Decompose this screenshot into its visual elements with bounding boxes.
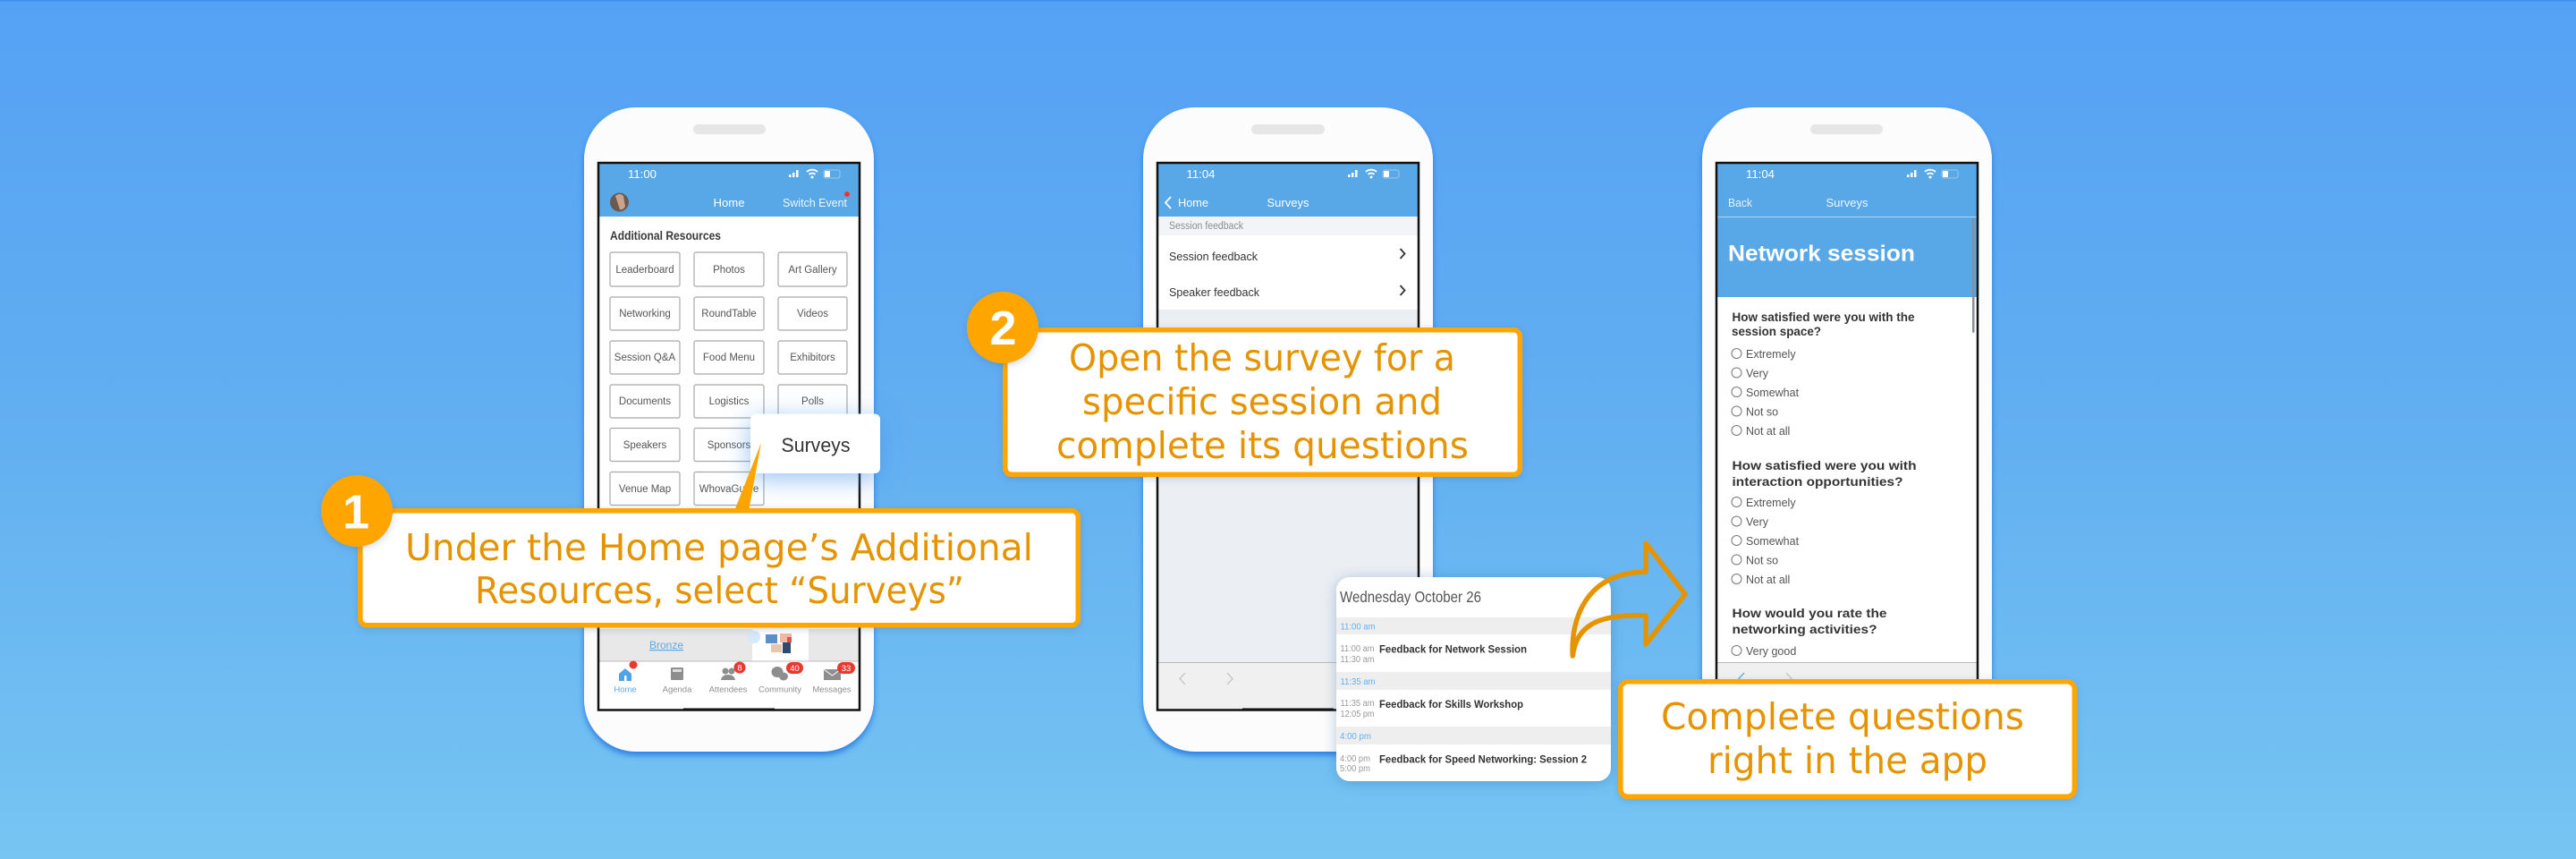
question 1: Extremely xyxy=(1746,348,1796,361)
question 3: How would you rate the xyxy=(1732,606,1887,620)
resource button grid: Photos xyxy=(713,265,745,276)
resource button grid xyxy=(610,252,847,505)
session list card: 11:00 am xyxy=(1340,644,1374,654)
question 1: Not so xyxy=(1746,406,1778,419)
phone 2 header: Home xyxy=(1178,196,1208,209)
callout 2: specific session and xyxy=(1082,380,1442,423)
feedback list: Speaker feedback xyxy=(1169,285,1259,299)
phone 2 header: Surveys xyxy=(1267,196,1309,209)
session list card: 11:00 am xyxy=(1340,621,1376,632)
resource button grid: Exhibitors xyxy=(790,353,835,363)
tab bar: Community xyxy=(758,685,801,694)
feedback list: Session feedback xyxy=(1169,250,1258,263)
tab bar: Messages xyxy=(812,685,852,694)
feedback list: Session feedback xyxy=(1169,221,1243,232)
tab bar: 40 xyxy=(790,664,800,674)
question 2: Somewhat xyxy=(1746,535,1800,548)
phone 3 header: Network session xyxy=(1728,242,1915,267)
session list card: Feedback for Network Session xyxy=(1379,642,1527,655)
question 1 xyxy=(1732,310,1915,438)
phone 2 header: 11:04 xyxy=(1186,167,1215,181)
resource button grid: Session Q&A xyxy=(614,353,676,363)
phone 3: survey questions xyxy=(1702,107,1992,755)
resource button grid: Videos xyxy=(797,309,828,319)
step badge 1: 1 xyxy=(343,485,369,539)
question 1: Very xyxy=(1746,367,1769,379)
resource button grid: Logistics xyxy=(709,396,750,407)
question 3 xyxy=(1732,606,1887,658)
callout 1 xyxy=(360,511,1078,625)
question 1: session space? xyxy=(1732,324,1821,338)
callout 2: Open the survey for a xyxy=(1069,336,1455,379)
phone 1: home screen xyxy=(584,107,874,755)
phone 1 app header: Switch Event xyxy=(783,196,847,209)
question 1: Somewhat xyxy=(1746,387,1800,399)
resource button grid: Leaderboard xyxy=(615,265,674,276)
callout 3 xyxy=(1621,682,2074,796)
tab bar: Home xyxy=(614,685,637,694)
session list card xyxy=(1336,577,1611,781)
phone 3 header: Back xyxy=(1728,196,1752,209)
question 1: How satisfied were you with the xyxy=(1732,310,1915,324)
resource button grid: Networking xyxy=(619,309,671,319)
resource button grid: Food Menu xyxy=(703,353,755,363)
resource button grid: RoundTable xyxy=(701,309,757,319)
phone 1 app header xyxy=(597,162,860,217)
surveys popup xyxy=(750,413,880,473)
resource button grid: Documents xyxy=(619,396,671,407)
callout 3: right in the app xyxy=(1707,739,1987,782)
phone 2: surveys list xyxy=(1143,107,1433,755)
scrollbar xyxy=(1972,218,1975,333)
step badge 2 xyxy=(967,292,1038,363)
question 2: Not so xyxy=(1746,555,1778,567)
resource button grid: Polls xyxy=(801,396,824,407)
session list card: 11:35 am xyxy=(1340,699,1374,709)
additional resources heading: Additional Resources xyxy=(610,229,721,242)
question 2: Not at all xyxy=(1746,574,1790,586)
question 2: Very xyxy=(1746,515,1769,528)
session list card: 4:00 pm xyxy=(1340,754,1370,764)
phone 3 header xyxy=(1716,162,1979,297)
session list card: Feedback for Skills Workshop xyxy=(1379,698,1523,710)
phone 2 header xyxy=(1157,162,1419,217)
tab bar: 33 xyxy=(842,664,851,674)
tab bar xyxy=(614,660,855,710)
surveys popup: Surveys xyxy=(782,434,850,456)
session list card: 11:35 am xyxy=(1340,676,1376,687)
question 2 xyxy=(1732,458,1916,586)
session list card: Feedback for Speed Networking: Session 2 xyxy=(1379,753,1587,766)
phone 2 toolbar xyxy=(1157,662,1419,710)
feedback list xyxy=(1157,217,1419,310)
resource button grid: WhovaGuide xyxy=(699,484,758,495)
tab bar: Attendees xyxy=(709,685,748,694)
session list card: 4:00 pm xyxy=(1340,731,1371,742)
tab bar: 8 xyxy=(737,664,742,673)
session list card: 5:00 pm xyxy=(1340,764,1370,774)
session list card: 12:05 pm xyxy=(1340,710,1374,719)
phone 1 app header: 11:00 xyxy=(628,167,657,181)
callout 1: Resources, select “Surveys” xyxy=(475,569,964,612)
step badge 1 xyxy=(321,475,393,547)
resource button grid: Venue Map xyxy=(619,484,671,495)
callout 1: Under the Home page’s Additional xyxy=(405,526,1033,569)
resource button grid: Speakers xyxy=(623,440,667,451)
callout 2: complete its questions xyxy=(1056,424,1469,467)
tab bar: Agenda xyxy=(663,685,692,694)
question 3: Very good xyxy=(1746,645,1796,658)
question 3: networking activities? xyxy=(1732,622,1877,636)
callout 2 xyxy=(1005,330,1520,474)
session list card: 11:30 am xyxy=(1340,655,1374,665)
sponsor banner xyxy=(598,629,860,661)
step badge 2: 2 xyxy=(989,302,1017,355)
phone 1 app header: Home xyxy=(714,196,744,209)
resource button grid: Art Gallery xyxy=(788,265,837,276)
question 2: How satisfied were you with xyxy=(1732,458,1916,472)
question 2: Extremely xyxy=(1746,497,1796,509)
question 1: Not at all xyxy=(1746,425,1790,438)
question 2: interaction opportunities? xyxy=(1732,474,1903,489)
phone 3 toolbar xyxy=(1716,662,1978,710)
curved arrow xyxy=(1572,543,1685,656)
callout pointer xyxy=(734,443,761,511)
callout 3: Complete questions xyxy=(1661,695,2024,738)
sponsor banner: Bronze xyxy=(649,639,683,651)
resource button grid: Sponsors xyxy=(708,440,751,451)
phone 3 header: Surveys xyxy=(1826,196,1868,209)
phone 3 header: 11:04 xyxy=(1746,167,1775,181)
session list card: Wednesday October 26 xyxy=(1340,588,1481,606)
